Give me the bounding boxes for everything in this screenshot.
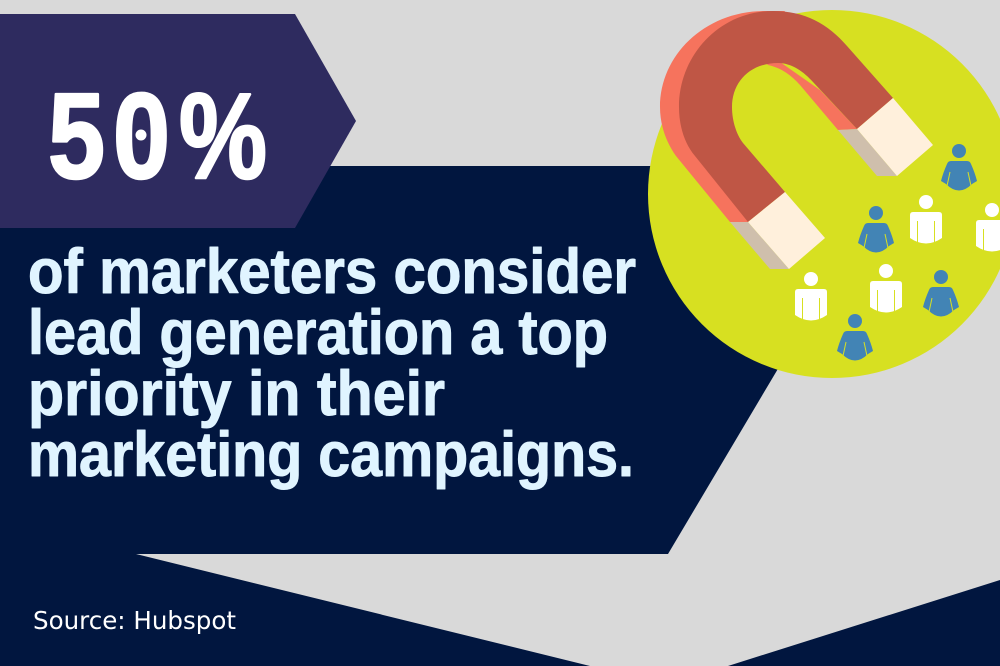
text block: main statement — [28, 237, 636, 490]
icon: magnet — [660, 11, 933, 269]
source text: Source: Hubspot — [33, 606, 236, 635]
heading: 50% — [48, 68, 267, 204]
panel: navy arrow banner — [0, 166, 782, 666]
icon: person blue 4 — [837, 314, 873, 360]
icon: person white 3 — [870, 264, 902, 312]
icon: person white 4 — [795, 272, 827, 320]
panel: navy bottom right corner — [728, 580, 1000, 666]
icon: person blue 1 — [941, 144, 977, 190]
icon: person blue 3 — [923, 270, 959, 316]
text block: main statement: priority in their — [28, 359, 445, 429]
icon: person blue 2 — [858, 206, 894, 252]
right pole shadow — [838, 129, 897, 176]
icon: lime circle — [648, 10, 1000, 378]
icon: person white 2 — [976, 203, 1000, 252]
right pole tip — [857, 98, 933, 176]
magnet side face inner — [765, 62, 857, 130]
heading: 50%: 5 — [48, 68, 105, 204]
text block: main statement: lead generation a top — [28, 298, 608, 368]
icon: person white 1 — [910, 195, 942, 244]
text block: main statement: marketing campaigns. — [28, 420, 634, 490]
magnet side face outer — [660, 11, 785, 222]
panel: purple pennant — [0, 14, 356, 228]
magnet front face — [679, 11, 893, 222]
left pole tip — [748, 192, 825, 269]
text block: main statement: of marketers consider — [28, 237, 636, 307]
heading: 50%: 0 — [113, 68, 170, 204]
left pole shadow — [730, 222, 789, 269]
heading: 50%: % — [179, 68, 267, 204]
